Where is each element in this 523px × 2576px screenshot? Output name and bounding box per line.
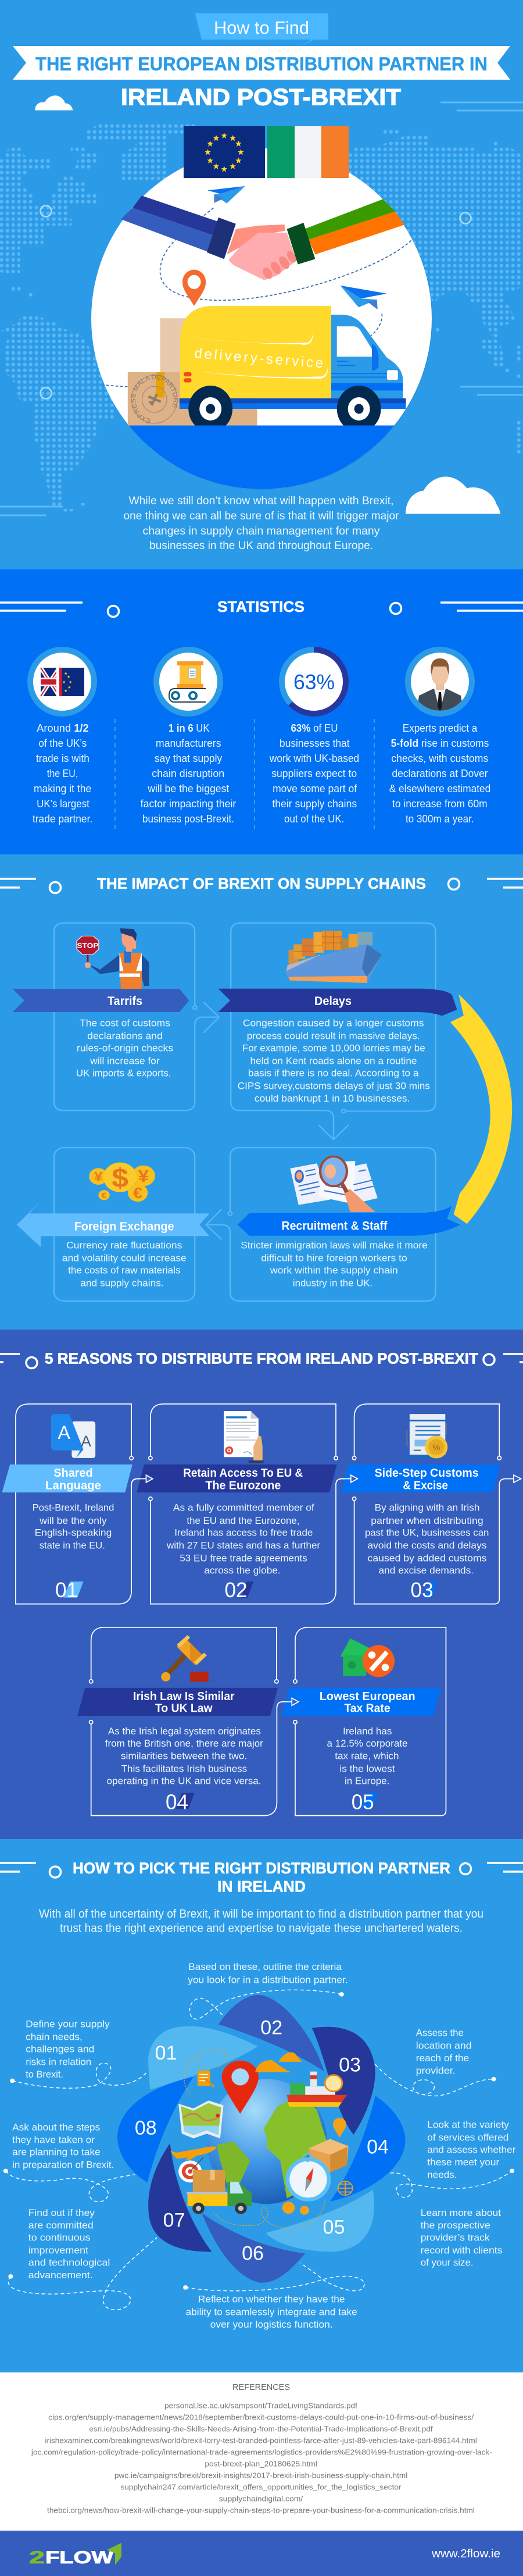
panel: references: cips.org/en/supply-management/news/2018/september/brexit-customs-delays-could-put-one-in-10-firms-out-of-business/ [48, 2413, 474, 2422]
stat: 63 percent: work with UK-based [269, 753, 359, 764]
panel: impact on supply chains [0, 854, 523, 1330]
card: irish law: from the British one, there are major [105, 1738, 263, 1749]
icon: target and plane [170, 2146, 216, 2182]
intro paragraph: changes in supply chain management for many [143, 525, 380, 537]
icon: red pin [222, 2061, 259, 2114]
stat: half of UK trade: making it the [34, 783, 91, 794]
label: step 05: of your size. [421, 2257, 473, 2268]
stat: 1 in 6 manufacturers [141, 647, 236, 825]
label: step 05: Learn more about [421, 2207, 501, 2218]
card: irish law: This facilitates Irish business [121, 1763, 247, 1774]
icon: compass [285, 2154, 331, 2201]
card: tax rate: tax rate, which [335, 1751, 399, 1762]
icon: small pin [333, 2118, 346, 2137]
label: step 01: Define your supply [26, 2018, 110, 2029]
card: shared language: will be the only [39, 1515, 107, 1526]
stat: 5-fold rise: 5-fold rise in customs [391, 737, 489, 749]
petal 03 [312, 2027, 375, 2135]
intro text: trust has the right experience and expertise to navigate these unchartered waters. [60, 1922, 463, 1935]
step numbers [135, 2017, 389, 2264]
step numbers: 04 [367, 2136, 389, 2158]
icon: currency coins [89, 1163, 155, 1202]
card: tarrifs: will increase for [89, 1055, 160, 1066]
label: step 05: provider’s track [421, 2232, 490, 2243]
card: irish law: To UK Law [155, 1702, 213, 1715]
panel: statistics [0, 569, 523, 854]
website url: www.2flow.ie [431, 2548, 500, 2560]
card: tax rate: 05 [352, 1790, 374, 1814]
card: side-step customs: partner when distributing [371, 1515, 483, 1526]
ribbon: irish law [77, 1688, 278, 1716]
panel: references: thebci.org/news/how-brexit-will-change-your-supply-chain-steps-to-prepare-your-business-for-a-communication-crisis.html [47, 2506, 475, 2515]
card: side-step customs: By aligning with an Irish [375, 1502, 479, 1513]
panel: references: post-brexit-plan_20180625.html [205, 2460, 317, 2468]
step numbers: 02 [260, 2017, 282, 2039]
card: shared language: 01 [55, 1578, 78, 1602]
label: step 04: of services offered [427, 2132, 508, 2143]
heading: 5 reasons: 5 REASONS TO DISTRIBUTE FROM IRELAND POST-BREXIT [45, 1351, 478, 1367]
card: tarrifs: Tarrifs [108, 995, 142, 1008]
card: foreign exchange: Foreign Exchange [74, 1220, 174, 1233]
icon: currency coins: € [133, 1184, 142, 1202]
card: foreign exchange: and volatility could increase [62, 1253, 187, 1264]
truck lettering: delivery-service [194, 345, 324, 371]
stat: 63 percent: 63% of EU [291, 722, 338, 734]
stat: 63 percent: suppliers expect to [271, 768, 357, 779]
stat: 1 in 6 manufacturers: say that supply [155, 753, 222, 764]
stat: 1 in 6 manufacturers: factor impacting their [141, 798, 236, 810]
step numbers: 06 [242, 2242, 264, 2264]
card: tax rate: is the lowest [339, 1763, 395, 1774]
icon: stop sign worker [77, 928, 149, 989]
intro text: With all of the uncertainty of Brexit, it will be important to find a distribution partner that you [39, 1908, 483, 1921]
logo: 2FLOW: 2 [29, 2548, 45, 2567]
icon: map [178, 2101, 224, 2139]
card: irish law: Irish Law Is Similar [133, 1690, 235, 1703]
orange dashed routes [184, 2050, 325, 2228]
card: tax rate: Tax Rate [344, 1702, 391, 1715]
card: delays: process could result in massive delays. [247, 1030, 420, 1041]
stat: half of UK trade: trade partner. [33, 813, 92, 825]
icon: paper plane right [340, 286, 387, 309]
step numbers: 05 [323, 2216, 345, 2238]
card: recruitment and staff: difficult to hire foreign workers to [261, 1253, 407, 1264]
card: side-step customs: & Excise [403, 1479, 448, 1492]
step numbers: 03 [339, 2054, 361, 2076]
card: delays: held on Kent roads alone on a routine [250, 1055, 417, 1066]
label: step 05: record with clients [421, 2244, 502, 2256]
icon: parcel [309, 2139, 349, 2172]
icon: cargo ship [287, 2072, 347, 2107]
heading: how to pick: HOW TO PICK THE RIGHT DISTRIBUTION PARTNER [73, 1859, 450, 1877]
illustration: delivery truck [180, 306, 406, 432]
icon: currency coins: ¥ [94, 1169, 103, 1184]
icon: world basket [338, 2181, 353, 2195]
petal 08 [117, 2077, 194, 2182]
ground segment [129, 426, 394, 489]
card: delays: Congestion caused by a longer customs [243, 1018, 424, 1028]
heading: statistics: STATISTICS [217, 598, 305, 615]
label: step 08: in preparation of Brexit. [12, 2159, 114, 2171]
label: step 08 [12, 2122, 114, 2171]
label: step 07: Find out if they [28, 2207, 95, 2218]
label: step 07: to continuous [28, 2232, 91, 2243]
panel: references [0, 2372, 523, 2531]
icon: cloud left [35, 95, 73, 111]
card: recruitment and staff: Recruitment & Staff [281, 1219, 388, 1233]
icon: translate [51, 1414, 95, 1458]
icon: currency coins: ¥ [138, 1166, 149, 1185]
card: side-step customs: past the UK, businesses can [365, 1527, 489, 1538]
panel: how to pick a partner [0, 1839, 523, 2372]
title ribbon: THE RIGHT EUROPEAN DISTRIBUTION PARTNER IN [35, 54, 488, 74]
petal 06 [202, 2213, 305, 2283]
icon: customs document and coin [406, 1414, 447, 1458]
petal 04 [330, 2096, 406, 2201]
ribbon: delays [218, 989, 457, 1016]
ribbon: shared language [2, 1465, 132, 1492]
card: delays [238, 995, 430, 1104]
card: access to EU and Eurozone: with 27 EU states and has a further [166, 1540, 320, 1551]
icon: translate: A [81, 1433, 91, 1450]
stat: 5-fold rise: declarations at Dover [392, 768, 488, 779]
dashed connectors [3, 1990, 514, 2310]
tag: How to Find [195, 13, 328, 46]
card: tarrifs: UK imports & exports. [76, 1068, 171, 1079]
card: delays: For example, some 10,000 lorries may be [242, 1042, 425, 1053]
petal 02 [218, 1995, 324, 2072]
icon: translate: A [58, 1422, 70, 1443]
card: access to EU and Eurozone: The Eurozone [206, 1479, 281, 1492]
ribbon: eurozone [137, 1465, 337, 1492]
card: foreign exchange [62, 1220, 187, 1288]
stat: 63 percent: 63% [293, 670, 335, 694]
stat: half of UK trade [27, 647, 97, 825]
step numbers: 01 [155, 2042, 177, 2064]
icon: delivery truck small [187, 2170, 252, 2214]
icon: currency coins: € [102, 1191, 107, 1200]
icon: UK EU flag: ★ [62, 680, 66, 685]
icon: coins [282, 2202, 309, 2215]
label: step 02: you look for in a distribution partner. [188, 1974, 348, 1985]
title ribbon [13, 46, 510, 80]
label: step 06: over your logistics function. [210, 2319, 333, 2330]
icon: trade document [224, 1411, 263, 1463]
card: access to EU and Eurozone: Retain Access To EU & [183, 1467, 303, 1480]
stat: 1 in 6 manufacturers: 1 in 6 UK [169, 722, 210, 734]
heading: impact: THE IMPACT OF BREXIT ON SUPPLY CHAINS [97, 875, 426, 892]
stat: 63 percent: their supply chains [272, 798, 357, 810]
icon: location pin [182, 270, 206, 306]
label: step 07 [28, 2207, 110, 2281]
label: step 04: needs. [427, 2169, 457, 2180]
illustration: parcels [128, 318, 257, 426]
card: delays: could bankrupt 1 in 10 businesses. [255, 1093, 410, 1104]
stat: 63 percent [269, 647, 359, 825]
step numbers: 07 [163, 2209, 185, 2231]
card: recruitment and staff: Stricter immigration laws will make it more [241, 1240, 428, 1251]
stat: half of UK trade: UK’s largest [37, 798, 89, 810]
icon: currency coins: $ [112, 1164, 128, 1193]
stat: 63 percent: businesses that [280, 737, 350, 749]
icon: businessman [418, 658, 461, 711]
petal 05 [266, 2190, 374, 2252]
card: tax rate: a 12.5% corporate [327, 1738, 408, 1749]
stat: 5-fold rise: to increase from 60m [392, 798, 488, 810]
intro paragraph [123, 494, 399, 552]
illustration: parcels: EXPRESS MALA DEPARTURE [131, 375, 178, 423]
panel: references: joc.com/regulation-policy/trade-policy/international-trade-agreements/logistics-providers%E2%80%99-frustration-growing-over-lack- [31, 2448, 492, 2457]
card: access to EU and Eurozone: As a fully committed member of [173, 1502, 314, 1513]
stat: 63 percent: out of the UK. [284, 813, 344, 825]
card: shared language: English-speaking [35, 1527, 112, 1538]
stat: 1 in 6 manufacturers: will be the biggest [147, 783, 229, 794]
step numbers: 08 [135, 2117, 157, 2139]
card: side-step customs: avoid the costs and delays [367, 1540, 487, 1551]
card: shared language: Shared [53, 1467, 93, 1480]
stat: 63 percent: move some part of [273, 783, 357, 794]
card: side-step customs: caused by added customs [367, 1552, 487, 1563]
card: tarrifs [76, 995, 173, 1079]
heading: how to pick: IN IRELAND [217, 1878, 306, 1896]
icon: document and magnifier [198, 2071, 214, 2087]
stat: half of UK trade: trade is with [36, 753, 89, 764]
tag: How to Find: How to Find [214, 17, 309, 38]
card: irish law: operating in the UK and vice versa. [107, 1776, 262, 1787]
label: step 03: location and [416, 2040, 472, 2051]
label: step 06: ability to seamlessly integrate and take [186, 2307, 357, 2318]
ribbon: foreign exchange [17, 1203, 209, 1247]
label: step 01: challenges and [26, 2044, 94, 2055]
label: step 01 [26, 2018, 110, 2080]
label: step 07: improvement [28, 2244, 88, 2256]
panel: references: pwc.ie/campaigns/brexit/brexit-insights/2017-brexit-irish-business-supply-chain.html [114, 2471, 407, 2480]
label: step 04 [427, 2119, 516, 2180]
panel: hero section [0, 13, 523, 552]
icon: handshake [121, 195, 404, 281]
number tabs [63, 1581, 437, 1809]
card: delays: basis if there is no deal. According to a [248, 1068, 419, 1079]
stat: half of UK trade: the EU, [47, 768, 78, 779]
card: shared language: state in the EU. [40, 1540, 105, 1551]
panel: references: personal.lse.ac.uk/sampsont/TradeLivingStandards.pdf [164, 2402, 357, 2410]
label: step 03 [416, 2027, 472, 2076]
card: delays: Delays [314, 995, 352, 1008]
stat: half of UK trade: of the UK’s [39, 737, 87, 749]
panel: references: esri.ie/pubs/Addressing-the-Skills-Needs-Arising-from-the-Potential-Trade-Implications-of-Brexit.pdf [89, 2425, 433, 2434]
card: access to EU and Eurozone: 53 EU free trade agreements [180, 1552, 307, 1563]
icon: money and percent [340, 1638, 395, 1677]
icon: gavel [161, 1635, 209, 1681]
card: side-step customs: 03 [410, 1578, 434, 1602]
icon: orange clouds [255, 2053, 302, 2072]
card: side-step customs [365, 1467, 489, 1602]
illustration: globe [207, 2079, 327, 2204]
label: step 08: Ask about the steps [12, 2122, 100, 2133]
label: step 05 [421, 2207, 502, 2268]
icon: cloud right [406, 477, 500, 514]
card: tarrifs: declarations and [87, 1030, 163, 1041]
panel: references: irishexaminer.com/breakingnews/world/brexit-lorry-test-branded-pointless-farce-after-just-89-vehicles-take-part-896144.html [45, 2436, 477, 2445]
card: shared language: Language [45, 1479, 101, 1492]
label: step 02: Based on these, outline the criteria [188, 1961, 342, 1972]
heading: how to pick [73, 1859, 450, 1896]
stat: 1 in 6 manufacturers: manufacturers [156, 737, 221, 749]
card: recruitment and staff [241, 1219, 428, 1288]
card: delays: CIPS survey,customs delays of just 30 mins [238, 1081, 430, 1092]
card: irish law: As the Irish legal system originates [108, 1726, 261, 1737]
stat: 1 in 6 manufacturers: business post-Brexit. [142, 813, 234, 825]
panel: references: REFERENCES [232, 2382, 290, 2392]
intro text [39, 1908, 483, 1935]
card: access to EU and Eurozone: Ireland has access to free trade [174, 1527, 313, 1538]
icon: resumes and magnifier [290, 1156, 378, 1212]
card: tarrifs: The cost of customs [80, 1018, 170, 1028]
intro paragraph: businesses in the UK and throughout Europe. [149, 539, 373, 552]
icon: UK EU flag [41, 668, 84, 696]
label: step 04: and assess whether [427, 2144, 516, 2155]
icon: UK EU flag: ★ [64, 671, 67, 676]
ribbon: recruitment [238, 1206, 460, 1236]
intro paragraph: While we still don’t know what will happen with Brexit, [129, 494, 394, 507]
card: shared language [33, 1467, 114, 1602]
label: step 07: and technological [28, 2257, 110, 2268]
label: step 04: Look at the variety [427, 2119, 509, 2130]
card: tax rate [320, 1690, 415, 1814]
petal 01 [148, 2026, 258, 2090]
panel: footer [0, 2531, 523, 2576]
card: tax rate: Lowest European [320, 1690, 415, 1703]
ribbon: tarrifs [13, 989, 189, 1012]
label: step 01: risks in relation [26, 2056, 91, 2067]
icon: UK EU flag: ★ [67, 675, 70, 679]
icon: paper plane top [207, 186, 245, 204]
arrow: yellow return arc [450, 994, 512, 1224]
card: foreign exchange: and supply chains. [80, 1277, 164, 1288]
card: access to EU and Eurozone [166, 1467, 320, 1602]
card: irish law: 04 [166, 1790, 188, 1814]
label: step 03: Assess the [416, 2027, 464, 2038]
icon: customs document and coin: % [432, 1443, 440, 1453]
hero circle illustration [91, 148, 432, 490]
flag: EU [184, 126, 265, 178]
card: tarrifs: rules-of-origin checks [77, 1042, 173, 1053]
icon: UK EU flag: ★ [67, 685, 71, 690]
label: step 05: the prospective [421, 2220, 490, 2231]
label: step 04: these meet your [427, 2157, 500, 2168]
card: access to EU and Eurozone: the EU and the Eurozone, [187, 1515, 299, 1526]
label: step 06 [186, 2293, 357, 2330]
label: step 08: are planning to take [12, 2146, 101, 2157]
ribbon: customs [341, 1465, 500, 1492]
stat: 1 in 6 manufacturers: chain disruption [152, 768, 224, 779]
label: step 02 [188, 1961, 348, 1985]
card: irish law [105, 1690, 263, 1814]
logo: 2FLOW: FLOW [45, 2548, 114, 2567]
icon: UK EU flag: ★ [64, 689, 67, 693]
card: access to EU and Eurozone: 02 [224, 1578, 248, 1602]
stat: 5-fold rise: to 300m a year. [406, 813, 474, 825]
label: step 06: Reflect on whether they have the [198, 2293, 345, 2304]
icon: container ship [285, 931, 382, 983]
ribbon: tax rate [282, 1688, 441, 1716]
panel: references: supplychaindigital.com/ [219, 2495, 303, 2503]
flag: Ireland [267, 126, 349, 178]
stat: half of UK trade: Around 1/2 [37, 722, 89, 734]
card: recruitment and staff: work within the supply chain [270, 1264, 398, 1276]
label: step 08: they have taken or [12, 2135, 95, 2146]
card: recruitment and staff: industry in the UK. [293, 1277, 372, 1288]
petal 07 [148, 2143, 212, 2252]
stat: 5-fold rise [389, 647, 490, 825]
card: tax rate: Ireland has [343, 1726, 392, 1737]
card: foreign exchange: the costs of raw materials [68, 1264, 180, 1276]
panel: references: supplychain247.com/article/brexit_offers_opportunities_for_the_logistics_sector [120, 2483, 402, 2492]
stat: 5-fold rise: & elsewhere estimated [389, 783, 490, 794]
card: side-step customs: Side-Step Customs [375, 1467, 479, 1480]
panel: 5 reasons [0, 1330, 523, 1839]
icon: UK EU flag: ★ [69, 680, 72, 685]
stat: 5-fold rise: checks, with customs [391, 753, 488, 764]
card: side-step customs: and excise demands. [379, 1565, 474, 1576]
card: access to EU and Eurozone: across the globe. [204, 1565, 281, 1576]
intro paragraph: one thing we can all be sure of is that it will trigger major [123, 510, 399, 522]
title: Ireland Post-Brexit: IRELAND POST-BREXIT [121, 85, 401, 111]
label: step 01: to Brexit. [26, 2069, 63, 2080]
stat: 5-fold rise: Experts predict a [403, 722, 478, 734]
label: step 03: reach of the [416, 2053, 469, 2064]
card: foreign exchange: Currency rate fluctuations [66, 1240, 182, 1251]
card: tax rate: in Europe. [345, 1776, 389, 1787]
card: shared language: Post-Brexit, Ireland [33, 1502, 114, 1513]
label: step 01: chain needs, [26, 2031, 83, 2043]
card: irish law: similarities between the two. [121, 1751, 247, 1762]
dotted world map [0, 116, 523, 523]
label: step 03: provider. [416, 2065, 456, 2076]
logo: 2FLOW [29, 2543, 121, 2567]
label: step 07: advancement. [28, 2269, 93, 2281]
icon: crate on conveyor [169, 661, 206, 702]
dashed route [103, 208, 412, 387]
icon: stop sign worker: STOP [77, 942, 99, 950]
label: step 07: are committed [28, 2220, 94, 2231]
